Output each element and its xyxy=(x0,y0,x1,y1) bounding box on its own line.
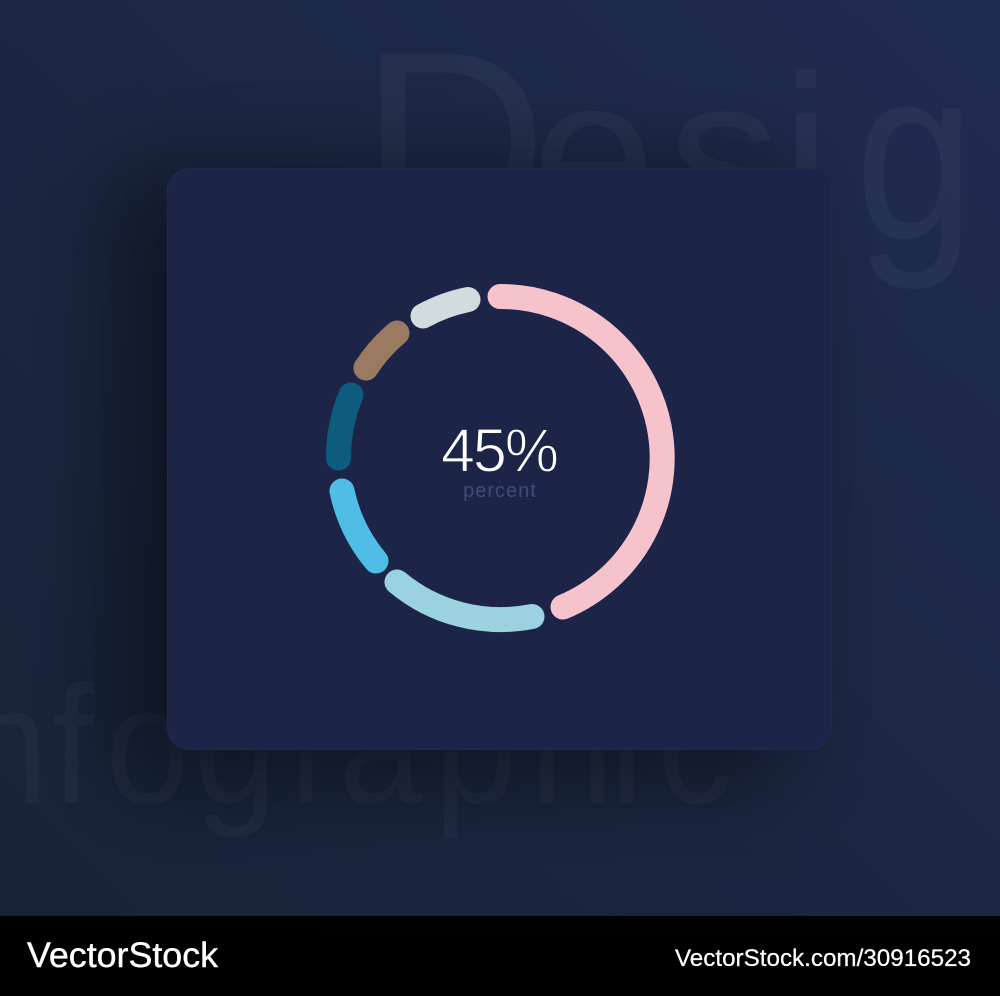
value: 45%: 45% xyxy=(441,416,559,484)
segment: light blue xyxy=(397,582,532,620)
background word: Infographic: h xyxy=(530,651,613,839)
background word: Infographic: g xyxy=(194,651,277,839)
background word: Infographic: r xyxy=(289,651,339,839)
background word: Design: D xyxy=(360,0,548,288)
background word: Infographic: i xyxy=(610,651,643,839)
segment: dark teal xyxy=(338,395,351,458)
segment: sky blue xyxy=(342,491,376,561)
background word: Infographic: o xyxy=(106,651,189,839)
watermark url: VectorStock.com/30916523 xyxy=(675,945,971,972)
watermark logo: VectorStock xyxy=(27,936,219,975)
background word: Infographic: f xyxy=(52,651,94,839)
segment: brown xyxy=(366,333,397,368)
label: percent: percent xyxy=(463,480,537,502)
card shadow xyxy=(112,165,792,785)
segment: pale grey xyxy=(423,300,468,316)
background word: Infographic: p xyxy=(434,651,517,839)
background word: Infographic: a xyxy=(339,651,423,839)
background word: Design: e xyxy=(531,28,656,280)
background word: Design xyxy=(360,0,1000,290)
card panel xyxy=(168,168,832,750)
donut chart xyxy=(338,296,662,620)
background word: Design: s xyxy=(668,28,780,280)
background word: Design: i xyxy=(781,28,831,280)
watermark bar xyxy=(0,916,1000,996)
background word: Design: g xyxy=(855,16,975,290)
background word: Infographic: c xyxy=(658,651,733,839)
segment: pink 45% xyxy=(500,296,662,607)
